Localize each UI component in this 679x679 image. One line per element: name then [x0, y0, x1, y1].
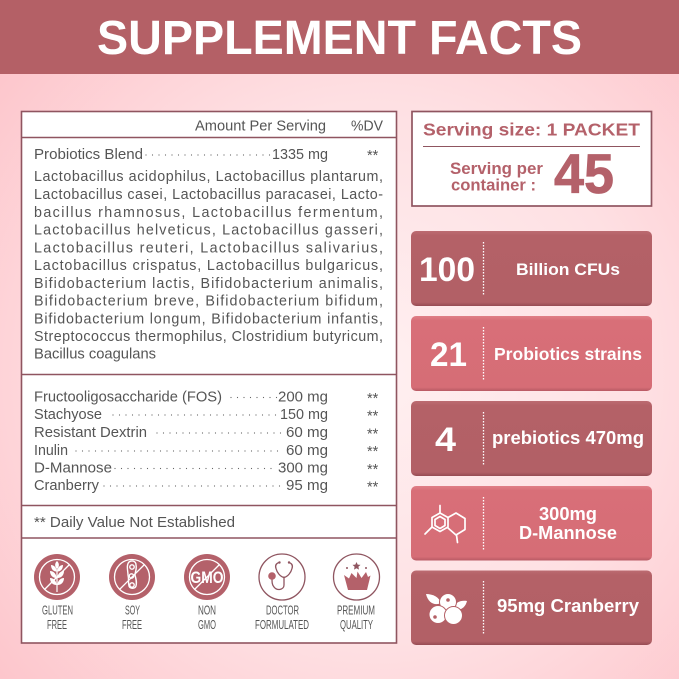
- prebiotics and extracts rows: Stachyose: [34, 407, 102, 423]
- label: GMO: [198, 617, 216, 632]
- prebiotics and extracts rows: 200 mg: [278, 390, 328, 406]
- probiotic strains list: Bacillus coagulans: [34, 347, 156, 363]
- prebiotics and extracts rows: **: [367, 444, 379, 460]
- card: 4 prebiotics 470mg: 4: [435, 421, 456, 459]
- card: 95mg cranberry: [411, 570, 652, 645]
- label: [42, 602, 73, 632]
- probiotic strains list: Lactobacillus casei, Lactobacillus paracasei, Lacto-: [34, 187, 383, 203]
- header banner: [0, 0, 679, 74]
- probiotics blend row: [34, 147, 379, 164]
- icon: premium quality: [334, 554, 380, 632]
- probiotic strains list: Lactobacillus crispatus, Lactobacillus bulgaricus,: [34, 258, 383, 274]
- prebiotics and extracts rows: Resistant Dextrin: [34, 425, 147, 441]
- label: PREMIUM: [337, 602, 375, 618]
- prebiotics and extracts rows: **: [367, 462, 379, 478]
- probiotic strains list: Bifidobacterium longum, Bifidobacterium infantis,: [34, 312, 383, 328]
- probiotic strains list: Streptococcus thermophilus, Clostridium butyricum,: [34, 329, 383, 345]
- card: 100 billion cfus: 100: [419, 251, 475, 289]
- probiotics blend row: 1335 mg: [272, 147, 328, 163]
- table column headings: %DV: [351, 118, 383, 134]
- panel: nutrition facts table: [21, 112, 397, 643]
- text: 300mg: [539, 503, 597, 524]
- probiotic strains list: Bifidobacterium lactis, Bifidobacterium animalis,: [34, 276, 383, 292]
- servings per container label: container :: [451, 176, 536, 194]
- probiotics blend row: **: [367, 148, 379, 164]
- prebiotics and extracts rows: **: [367, 480, 379, 496]
- panel: serving size box: [412, 112, 652, 206]
- icon: non gmo: GMO: [190, 569, 224, 587]
- icon: molecule: [425, 506, 465, 542]
- label: DOCTOR: [266, 602, 299, 618]
- label: FREE: [122, 617, 142, 632]
- prebiotics and extracts rows: D-Mannose: [34, 460, 112, 476]
- label: [198, 602, 216, 632]
- label: NON: [198, 602, 216, 618]
- prebiotics and extracts rows: **: [367, 426, 379, 442]
- serving size heading: Serving size: 1 PACKET: [423, 120, 640, 140]
- probiotic strains list: Lactobacillus acidophilus, Lactobacillus plantarum,: [34, 169, 383, 185]
- probiotic strains list: bacillus rhamnosus, Lactobacillus fermentum,: [34, 205, 383, 221]
- label: GLUTEN: [42, 602, 73, 618]
- table column headings: [195, 118, 383, 134]
- prebiotics and extracts rows: [34, 390, 379, 496]
- prebiotics and extracts rows: Fructooligosaccharide (FOS): [34, 390, 222, 406]
- text: D-Mannose: [519, 522, 617, 543]
- probiotics blend row: Probiotics Blend: [34, 147, 143, 163]
- card: 300mg d-mannose: [411, 486, 652, 560]
- prebiotics and extracts rows: 60 mg: [286, 425, 328, 441]
- prebiotics and extracts rows: Cranberry: [34, 478, 100, 494]
- probiotic strains list: [34, 169, 383, 363]
- label: SOY: [125, 602, 140, 618]
- card: 21 probiotics strains: [411, 316, 652, 391]
- text: [519, 503, 617, 543]
- prebiotics and extracts rows: 60 mg: [286, 443, 328, 459]
- prebiotics and extracts rows: **: [367, 391, 379, 407]
- icon: doctor formulated: [255, 554, 309, 632]
- table column headings: Amount Per Serving: [195, 118, 326, 134]
- prebiotics and extracts rows: 150 mg: [280, 407, 328, 423]
- label: FORMULATED: [255, 617, 309, 632]
- servings per container label: Serving per: [450, 159, 543, 178]
- card: 4 prebiotics 470mg: prebiotics 470mg: [492, 427, 644, 448]
- card: 21 probiotics strains: 21: [430, 336, 467, 374]
- title: SUPPLEMENT FACTS: [97, 12, 582, 65]
- probiotic strains list: Bifidobacterium breve, Bifidobacterium bifidum,: [34, 294, 383, 310]
- icon: soy free: [109, 554, 155, 632]
- card: 21 probiotics strains: Probiotics strains: [494, 344, 642, 364]
- probiotic strains list: Lactobacillus helveticus, Lactobacillus gasseri,: [34, 223, 383, 239]
- card: 4 prebiotics 470mg: [411, 401, 652, 476]
- icon: gluten free: [34, 554, 80, 632]
- servings per container number: 45: [554, 142, 614, 205]
- card: 100 billion cfus: [411, 231, 652, 306]
- prebiotics and extracts rows: **: [367, 408, 379, 424]
- prebiotics and extracts rows: 300 mg: [278, 460, 328, 476]
- prebiotics and extracts rows: Inulin: [34, 443, 68, 459]
- icon: berries: [426, 594, 467, 624]
- card: 95mg cranberry: 95mg Cranberry: [497, 595, 640, 616]
- daily value footnote: ** Daily Value Not Established: [34, 515, 235, 531]
- probiotic strains list: Lactobacillus reuteri, Lactobacillus salivarius,: [34, 240, 383, 256]
- label: QUALITY: [340, 617, 373, 632]
- label: [337, 602, 375, 632]
- servings per container label: [450, 159, 543, 194]
- label: FREE: [47, 617, 67, 632]
- prebiotics and extracts rows: 95 mg: [286, 478, 328, 494]
- label: [122, 602, 142, 632]
- label: [255, 602, 309, 632]
- card: 100 billion cfus: Billion CFUs: [516, 260, 620, 279]
- icon: non gmo: [184, 554, 230, 632]
